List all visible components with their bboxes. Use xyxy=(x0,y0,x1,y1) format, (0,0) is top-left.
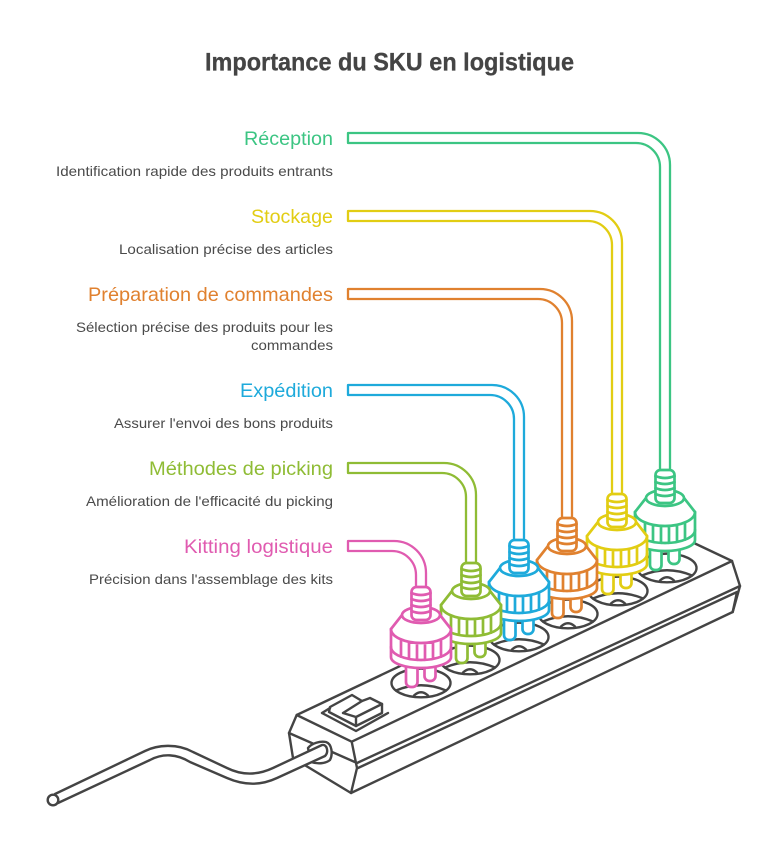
text block: Réception xyxy=(56,128,333,179)
power strip body xyxy=(289,535,740,793)
power switch xyxy=(322,695,388,731)
text block: Stockage: Stockage xyxy=(251,206,333,228)
text block: Stockage xyxy=(119,206,333,257)
connector and plug: Méthodes de picking xyxy=(348,463,501,663)
title: Importance du SKU en logistique xyxy=(205,48,574,76)
text block: Kitting logistique: Précision dans l'assemblage des kits xyxy=(89,571,333,587)
text block: Expédition xyxy=(114,380,333,431)
connector and plug: Préparation de commandes xyxy=(348,289,597,618)
power cord xyxy=(48,745,327,805)
connector and plug: Stockage xyxy=(348,211,647,594)
text block: Préparation de commandes: Sélection précise des produits pour les xyxy=(76,319,333,335)
text block: Méthodes de picking: Méthodes de picking xyxy=(149,458,333,480)
sockets xyxy=(392,554,696,697)
text block: Expédition: Assurer l'envoi des bons produits xyxy=(114,415,333,431)
text block: Préparation de commandes: Préparation de commandes xyxy=(88,284,333,306)
text block: Préparation de commandes xyxy=(76,284,333,353)
text block: Stockage: Localisation précise des articles xyxy=(119,241,333,257)
text block: Expédition: Expédition xyxy=(240,380,333,402)
text block: Réception: Identification rapide des produits entrants xyxy=(56,163,333,179)
text block: Méthodes de picking xyxy=(86,458,333,509)
text block: Méthodes de picking: Amélioration de l'efficacité du picking xyxy=(86,493,333,509)
text block: Préparation de commandes: commandes xyxy=(251,337,333,353)
text block: Kitting logistique xyxy=(89,536,333,587)
cord collar xyxy=(308,742,332,763)
connector and plug: Kitting logistique xyxy=(348,541,451,687)
connector and plug: Réception xyxy=(348,133,695,570)
text block: Réception: Réception xyxy=(244,128,333,150)
text block: Kitting logistique: Kitting logistique xyxy=(184,536,333,558)
connector and plug: Expédition xyxy=(348,385,549,640)
